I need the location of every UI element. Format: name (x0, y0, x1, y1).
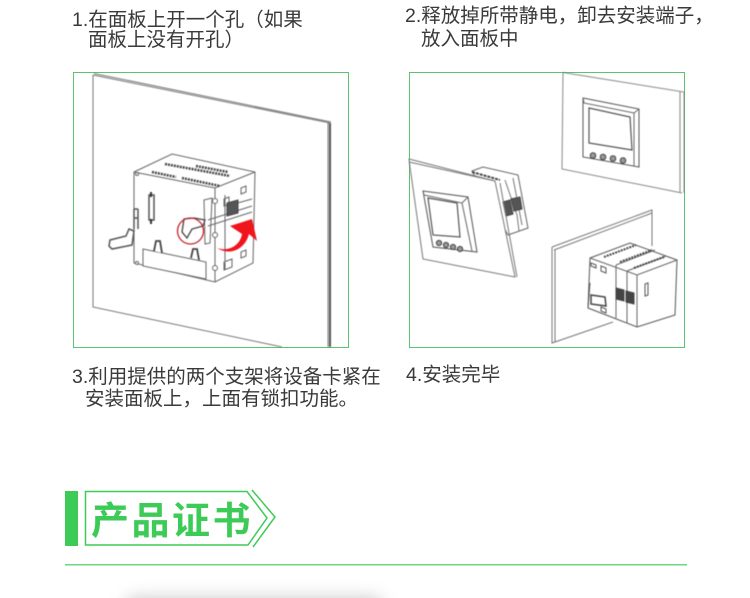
step 2 caption: 2.释放掉所带静电，卸去安装端子， (405, 5, 714, 27)
chevron (252, 490, 275, 547)
step 3 caption (72, 366, 381, 410)
panel: step 1 illustration (74, 72, 348, 348)
clip inside circle (182, 218, 205, 238)
panel: step 2 illustration (409, 72, 684, 348)
green bar (65, 491, 78, 546)
step 2 caption (405, 5, 714, 50)
red highlight circle (178, 218, 204, 244)
certificate shadow at bottom edge (125, 597, 383, 598)
top right plate with meter (562, 72, 684, 193)
red curved arrow (217, 219, 257, 252)
tag outline (86, 492, 267, 545)
step 2 caption: 放入面板中 (421, 28, 519, 50)
heading text: 产品证书 (91, 501, 253, 543)
terminal vent (227, 200, 238, 216)
divider (65, 564, 687, 566)
section heading: product certificates (65, 490, 275, 547)
side bracket (109, 209, 138, 249)
step 1 caption: 面板上没有开孔） (88, 29, 244, 51)
device body (134, 154, 255, 282)
step 1 caption (72, 9, 303, 51)
step 4 caption: 4.安装完毕 (406, 364, 500, 386)
step 3 caption: 3.利用提供的两个支架将设备卡紧在 (72, 366, 381, 388)
step 3 caption: 安装面板上，上面有锁扣功能。 (85, 388, 358, 410)
step 1 caption: 1.在面板上开一个孔（如果 (72, 9, 303, 31)
mounting plate (93, 74, 331, 347)
left plate with meter (409, 159, 528, 277)
bottom right plate with device (552, 210, 677, 343)
